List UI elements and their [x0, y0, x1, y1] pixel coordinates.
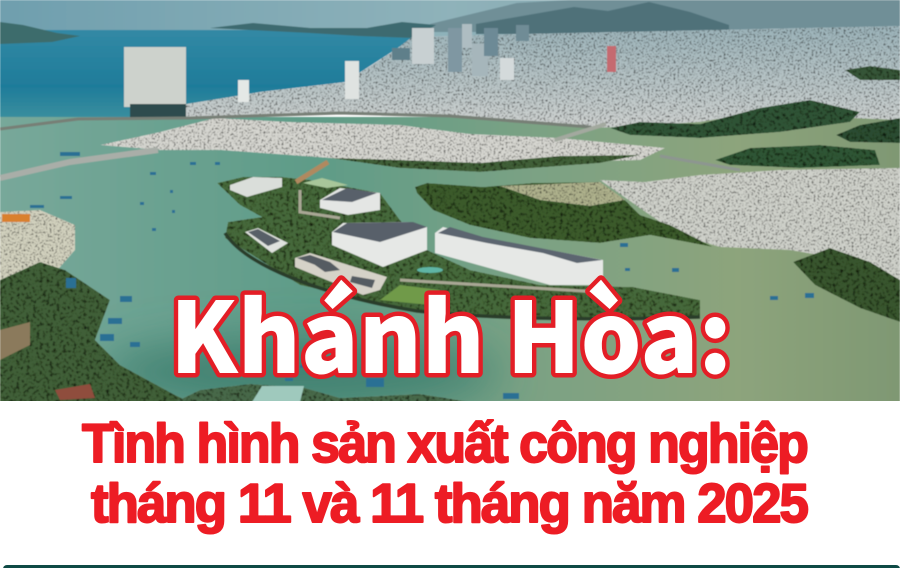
- resort pool: [417, 267, 443, 273]
- resort building one: [332, 222, 427, 267]
- east bridge: [660, 156, 740, 170]
- subtitle line two: tháng 11 và 11 tháng năm 2025: [91, 472, 808, 534]
- dark green footer bar: [3, 565, 900, 568]
- upper bridge: [0, 113, 590, 129]
- south-west vegetation: [0, 262, 190, 402]
- footbridge: [296, 162, 328, 182]
- lower bridge: [0, 150, 158, 178]
- title: Khánh Hòa: Khánh Hòa:: [170, 260, 732, 402]
- left hill: [0, 22, 80, 44]
- island greenery fringe: [330, 155, 640, 172]
- south shore: [175, 384, 470, 402]
- palm island: [415, 182, 713, 247]
- sea: [0, 30, 420, 124]
- title: Khánh Hòa: Khánh Hòa:: [170, 260, 732, 402]
- resort building four: [230, 177, 282, 197]
- brown ground: [0, 322, 30, 360]
- downtown high-rises: [392, 24, 616, 80]
- red roof: [55, 384, 95, 400]
- coastal high-rise tower: [124, 47, 186, 118]
- aerial photo of Nha Trang river and city: [0, 0, 900, 404]
- resort green roof building: [303, 178, 348, 188]
- north-east green island: [715, 145, 880, 168]
- central islands: [210, 22, 436, 38]
- small white tower: [238, 80, 249, 102]
- distant mountains: [430, 0, 900, 32]
- palm island houses: [500, 182, 625, 206]
- subtitle: [82, 412, 808, 534]
- east mangrove: [836, 118, 900, 143]
- resort building two: [435, 227, 603, 285]
- orange roof: [2, 214, 30, 222]
- river water: [0, 117, 900, 402]
- resort villa row: [295, 253, 387, 295]
- south-east green bank: [793, 248, 900, 322]
- dark teal water shade: [100, 340, 500, 404]
- resort embankment: [225, 233, 700, 319]
- near mountains: [476, 2, 729, 34]
- west bank city: [0, 210, 75, 290]
- fishing boats: [30, 152, 814, 399]
- green patch in city: [845, 66, 900, 80]
- right side city: [600, 168, 900, 290]
- resort villa: [245, 228, 288, 253]
- mangroves north bank: [610, 100, 860, 138]
- resort building three: [320, 188, 380, 215]
- resort island: [217, 177, 700, 319]
- subtitle line one: Tình hình sản xuất công nghiệp: [82, 412, 807, 474]
- midriver city island: [100, 118, 665, 170]
- main city: [186, 26, 900, 128]
- photo bottom edge: [0, 401, 900, 568]
- sky: [0, 0, 900, 40]
- right bridge: [555, 124, 606, 140]
- resort lawn: [380, 285, 440, 305]
- resort road: [300, 190, 600, 292]
- south shore roof: [252, 386, 304, 402]
- riverside tower: [345, 61, 359, 99]
